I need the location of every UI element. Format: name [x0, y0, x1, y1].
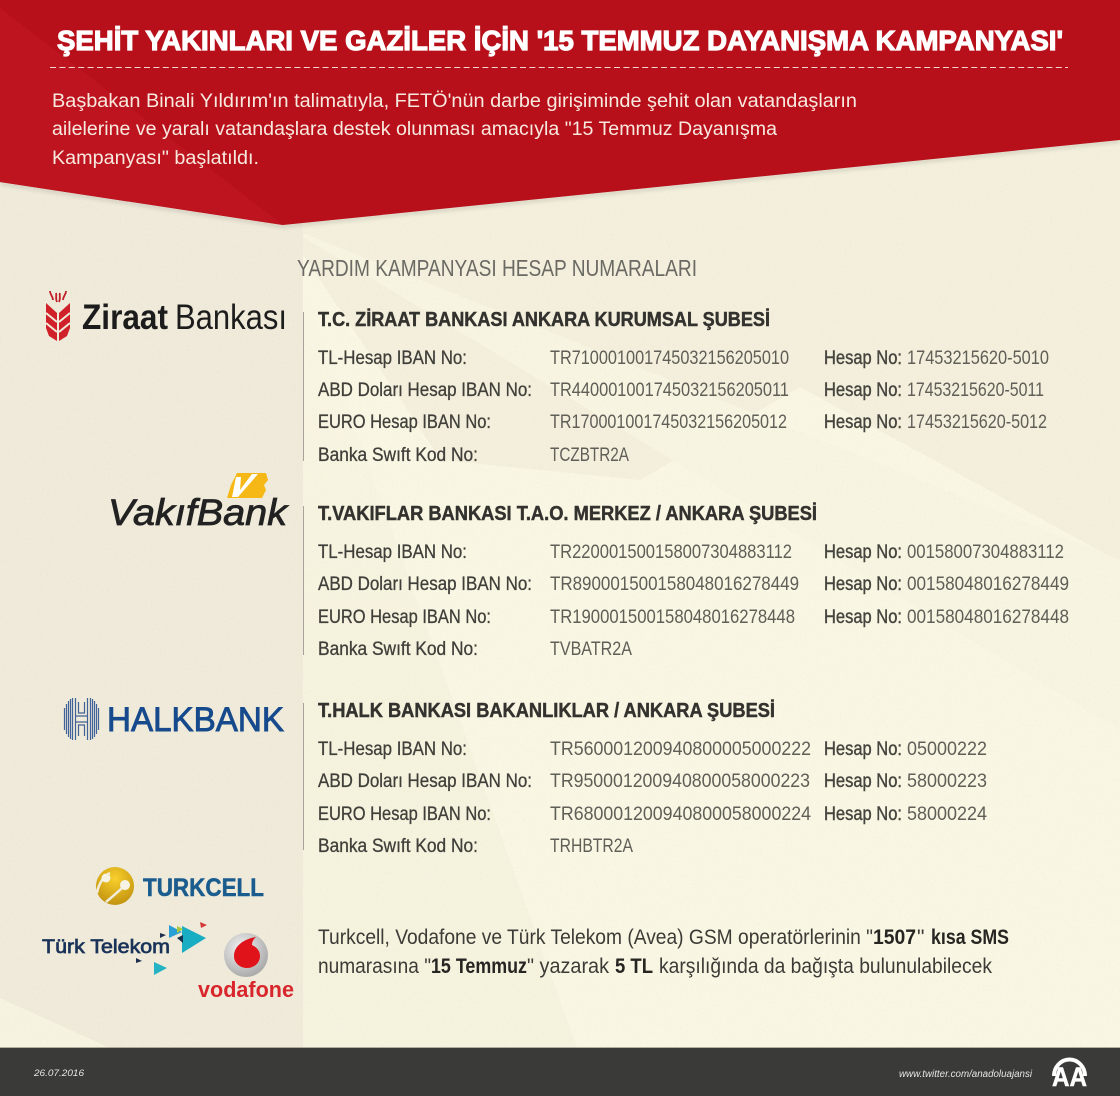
logo: Türk Telekom	[42, 922, 207, 975]
logo: Ziraat Bankası	[46, 291, 287, 341]
EURO row	[318, 607, 1069, 628]
logo: Türk Telekom: Türk Telekom	[42, 937, 170, 958]
EURO row: 58000224	[907, 804, 987, 825]
logo: Vodafone	[198, 933, 294, 1002]
SMS donation text: karşılığında da bağışta bulunulabilecek	[659, 955, 992, 978]
TL row	[318, 348, 1049, 369]
TL row: TL-Hesap IBAN No:	[318, 348, 467, 369]
USD row	[318, 574, 1069, 595]
EURO row: EURO Hesap IBAN No:	[318, 412, 491, 433]
TL row	[318, 739, 987, 760]
EURO row: TR680001200940800058000224	[550, 804, 811, 825]
USD row: 17453215620-5011	[907, 380, 1044, 401]
logo: Ziraat Bankası: Ziraat	[82, 298, 168, 337]
logo: VakıfBank: VakıfBank	[108, 492, 290, 533]
EURO row: Hesap No:	[824, 412, 902, 433]
USD row: TR950001200940800058000223	[550, 771, 810, 792]
logo: Turkcell	[96, 867, 264, 905]
SWIFT row: Banka Swıft Kod No:	[318, 445, 478, 466]
SWIFT row	[318, 445, 629, 466]
SWIFT row: Banka Swıft Kod No:	[318, 639, 478, 660]
EURO row: TR190001500158048016278448	[550, 607, 795, 628]
TL row: TR710001001745032156205010	[550, 348, 789, 369]
USD row: 58000223	[907, 771, 987, 792]
intro text: Başbakan Binali Yıldırım'ın talimatıyla, FETÖ'nün darbe girişiminde şehit olan vatandaşların	[52, 91, 857, 112]
icon: yellow V B mark	[227, 473, 268, 498]
USD row: TR440001001745032156205011	[550, 380, 789, 401]
logo: Ziraat Bankası: Bankası	[175, 298, 287, 337]
EURO row: EURO Hesap IBAN No:	[318, 607, 491, 628]
TL row: Hesap No:	[824, 739, 902, 760]
icon: Anadolu Agency logo: AA	[1052, 1062, 1087, 1092]
USD row: Hesap No:	[824, 771, 902, 792]
USD row: 00158048016278449	[907, 574, 1069, 595]
TL row: TR220001500158007304883112	[550, 542, 792, 563]
USD row: Hesap No:	[824, 380, 902, 401]
intro text	[52, 91, 857, 169]
bank heading: T.C. ZİRAAT BANKASI ANKARA KURUMSAL ŞUBESİ	[318, 308, 770, 331]
TL row: TR560001200940800005000222	[550, 739, 811, 760]
EURO row	[318, 804, 987, 825]
SWIFT row	[318, 836, 633, 857]
intro text: ailelerine ve yaralı vatandaşlara destek olunması amacıyla "15 Temmuz Dayanışma	[52, 119, 777, 140]
USD row: ABD Doları Hesap IBAN No:	[318, 574, 532, 595]
EURO row: TR170001001745032156205012	[550, 412, 787, 433]
panel: Ziraat Bankası accounts	[304, 308, 1049, 466]
bank heading: T.HALK BANKASI BAKANLIKLAR / ANKARA ŞUBESİ	[318, 699, 775, 722]
panel: VakıfBank accounts	[304, 502, 1069, 660]
title: ŞEHİT YAKINLARI VE GAZİLER İÇİN '15 TEMMUZ DAYANIŞMA KAMPANYASI'	[57, 25, 1063, 56]
icon: striped H	[64, 698, 98, 740]
TL row: Hesap No:	[824, 542, 902, 563]
USD row	[318, 771, 987, 792]
TL row	[318, 542, 1064, 563]
EURO row: EURO Hesap IBAN No:	[318, 804, 491, 825]
title divider	[50, 66, 1068, 68]
USD row: ABD Doları Hesap IBAN No:	[318, 771, 532, 792]
SWIFT row: TCZBTR2A	[550, 445, 629, 466]
TL row: 05000222	[907, 739, 987, 760]
icon: wheat	[46, 291, 70, 341]
SWIFT row: TVBATR2A	[550, 639, 632, 660]
SMS donation text: 1507	[873, 926, 916, 949]
SMS donation text: " yazarak	[527, 955, 609, 978]
footer twitter address: www.twitter.com/anadoluajansi	[899, 1069, 1033, 1080]
EURO row: 17453215620-5012	[907, 412, 1047, 433]
footer bar	[0, 1047, 1120, 1096]
TL row: Hesap No:	[824, 348, 902, 369]
SMS donation text: kısa SMS	[931, 926, 1009, 949]
TL row: TL-Hesap IBAN No:	[318, 739, 467, 760]
SMS donation text: "	[917, 926, 924, 949]
section heading: YARDIM KAMPANYASI HESAP NUMARALARI	[297, 255, 697, 281]
USD row: TR890001500158048016278449	[550, 574, 799, 595]
USD row	[318, 380, 1044, 401]
EURO row: 00158048016278448	[907, 607, 1069, 628]
SMS donation text: 15 Temmuz	[431, 955, 527, 978]
EURO row: Hesap No:	[824, 607, 902, 628]
SMS donation text: Turkcell, Vodafone ve Türk Telekom (Avea) GSM operatörlerinin "	[318, 926, 873, 949]
TL row: 17453215620-5010	[907, 348, 1049, 369]
logo: Vodafone: vodafone	[198, 977, 294, 1002]
panel: Halkbank accounts	[304, 699, 987, 857]
bank heading: T.VAKIFLAR BANKASI T.A.O. MERKEZ / ANKARA ŞUBESİ	[318, 502, 817, 525]
TL row: 00158007304883112	[907, 542, 1064, 563]
EURO row	[318, 412, 1047, 433]
SMS donation text: numarasına "	[318, 955, 431, 978]
SWIFT row	[318, 639, 632, 660]
USD row: Hesap No:	[824, 574, 902, 595]
logo: Halkbank: HALKBANK	[107, 701, 284, 739]
SMS donation text	[318, 926, 1009, 978]
SWIFT row: Banka Swıft Kod No:	[318, 836, 478, 857]
logo: VakıfBank	[108, 473, 290, 533]
red header banner	[0, 0, 1120, 227]
EURO row: Hesap No:	[824, 804, 902, 825]
USD row: ABD Doları Hesap IBAN No:	[318, 380, 532, 401]
SWIFT row: TRHBTR2A	[550, 836, 633, 857]
logo: Turkcell: TURKCELL	[143, 874, 264, 902]
TL row: TL-Hesap IBAN No:	[318, 542, 467, 563]
intro text: Kampanyası" başlatıldı.	[52, 148, 259, 169]
footer date: 26.07.2016	[33, 1068, 85, 1079]
SMS donation text: 5 TL	[615, 955, 653, 978]
